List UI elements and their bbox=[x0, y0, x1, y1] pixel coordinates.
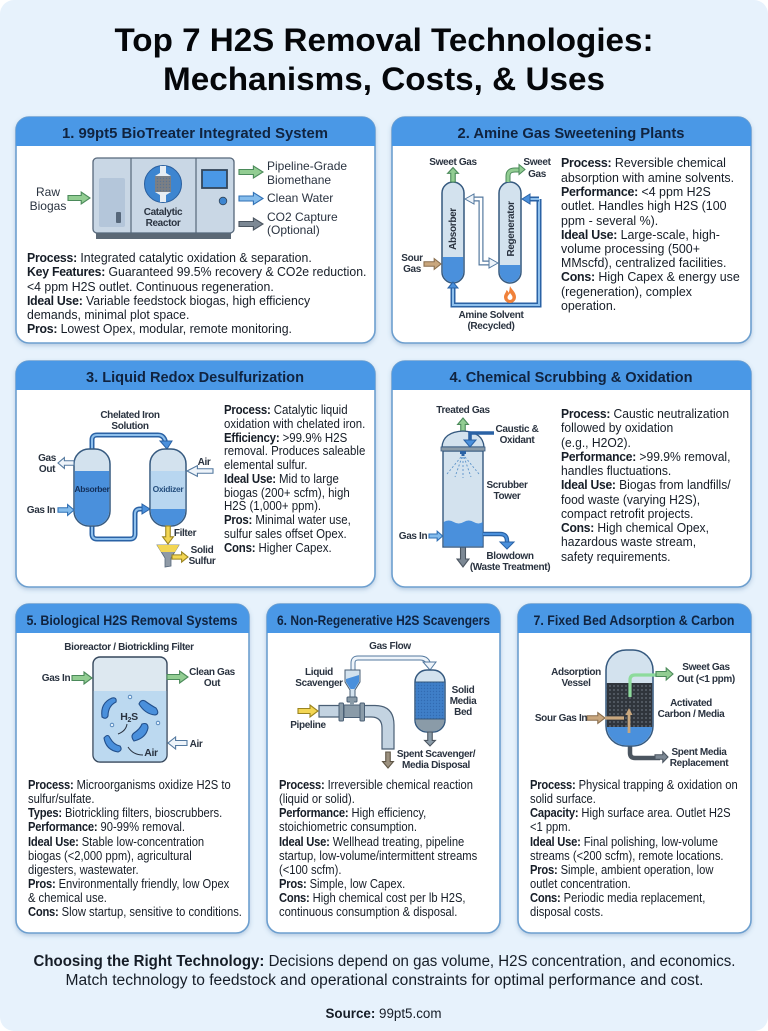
title: Top 7 H2S Removal Technologies: bbox=[114, 22, 654, 58]
panel 3 text: H2S (1,000+ ppm). bbox=[224, 498, 321, 513]
diagram labels: Gas In bbox=[42, 673, 70, 684]
panel 5 text bbox=[28, 777, 242, 919]
panel 3 text: removal. Produces saleable bbox=[224, 443, 366, 458]
diagram labels: Sweet Gas bbox=[682, 662, 731, 673]
panel 1 heading: 1. 99pt5 BioTreater Integrated System bbox=[62, 125, 328, 142]
diagram labels: Amine Solvent bbox=[459, 310, 524, 321]
label: raw biogas: Raw bbox=[36, 185, 60, 199]
panel 7 text: disposal costs. bbox=[530, 904, 603, 919]
arrow: solid media out bbox=[425, 732, 435, 746]
diagram labels: Treated Gas bbox=[436, 405, 490, 416]
inner labels: H bbox=[120, 711, 128, 723]
diagram labels: Scavenger bbox=[295, 678, 343, 689]
panel 5 heading: 5. Biological H2S Removal Systems bbox=[26, 612, 238, 628]
diagram labels: Tower bbox=[494, 491, 521, 502]
panel 6 text: Performance: High efficiency, bbox=[279, 805, 426, 820]
panel 2 text: Cons: High Capex & energy use bbox=[561, 270, 740, 284]
arrow heads bbox=[448, 194, 530, 288]
arrow: air bbox=[187, 466, 213, 476]
diagram labels: Vessel bbox=[561, 678, 591, 689]
panel 3 text bbox=[224, 402, 366, 555]
vessel: oxidizer: Oxidizer bbox=[153, 484, 184, 494]
vessel: absorber: Absorber bbox=[448, 208, 459, 250]
arrow: gas in bbox=[72, 672, 92, 684]
panel 4 heading bbox=[392, 361, 751, 390]
diagram labels: Spent Media bbox=[671, 747, 727, 758]
diagram labels: Solid bbox=[191, 545, 214, 556]
panel 2 heading bbox=[392, 117, 751, 146]
diagram labels: Gas bbox=[528, 169, 547, 180]
bubbles bbox=[110, 695, 160, 727]
panel 6 text: Process: Irreversible chemical reaction bbox=[279, 777, 473, 792]
vessel: regenerator bbox=[499, 182, 521, 283]
arrow: raw biogas in bbox=[68, 192, 90, 204]
panel 3 text: Efficiency: >99.9% H2S bbox=[224, 430, 347, 445]
footer summary: Match technology to feedstock and operational constraints for optimal performance and cost. bbox=[66, 972, 704, 989]
arrow: solid sulfur bbox=[172, 552, 188, 562]
inner labels bbox=[118, 711, 158, 759]
panel: 5. Biological H2S Removal Systems bbox=[16, 604, 249, 933]
panel 2 text bbox=[561, 156, 740, 313]
panel 6 text: startup, low-volume/intermittent streams bbox=[279, 848, 477, 863]
panel 7 text: Pros: Simple, ambient operation, low bbox=[530, 862, 714, 877]
panel 6 text: continuous consumption & disposal. bbox=[279, 904, 457, 919]
panel 4 text: food waste (varying H2S), bbox=[561, 493, 700, 507]
arrow: pipeline in bbox=[298, 705, 318, 717]
pipeline bbox=[319, 697, 394, 749]
panel 2 text: Ideal Use: Large-scale, high- bbox=[561, 228, 720, 242]
panel 2 text: operation. bbox=[561, 299, 616, 313]
arrow: gas in bbox=[58, 505, 74, 515]
panel 6 text: Cons: High chemical cost per lb H2S, bbox=[279, 890, 466, 905]
panel 7 text: Cons: Periodic media replacement, bbox=[530, 890, 705, 905]
panel 5 text: digesters, wastewater. bbox=[28, 862, 139, 877]
diagram labels: Out (<1 ppm) bbox=[677, 674, 735, 685]
panel 5 text: biogas (<2,000 ppm), agricultural bbox=[28, 848, 192, 863]
panel 6 text: Ideal Use: Wellhead treating, pipeline bbox=[279, 834, 465, 849]
panel 2 text: Process: Reversible chemical bbox=[561, 156, 726, 170]
diagram: scavenger piping bbox=[290, 641, 477, 771]
panel: 3. Liquid Redox Desulfurization bbox=[16, 361, 375, 587]
panel 4 text: Process: Caustic neutralization bbox=[561, 407, 729, 421]
panel 3 text: elemental sulfur. bbox=[224, 457, 307, 472]
vessel: oxidizer bbox=[150, 449, 186, 526]
spent media pipe bbox=[630, 746, 668, 762]
vessel: absorber bbox=[74, 449, 111, 526]
panel 2 text: ppm - several %). bbox=[561, 214, 658, 228]
panel 1 text: <4 ppm H2S outlet. Continuous regeneration. bbox=[27, 280, 274, 294]
outputs bbox=[267, 159, 347, 237]
diagram labels: Out bbox=[204, 678, 221, 689]
diagram labels: Gas bbox=[38, 453, 57, 464]
diagram labels: Caustic & bbox=[496, 424, 539, 435]
diagram labels: Sweet Gas bbox=[429, 157, 478, 168]
outputs: Pipeline-Grade bbox=[267, 159, 347, 173]
title: Mechanisms, Costs, & Uses bbox=[163, 61, 605, 97]
panel 5 text: Ideal Use: Stable low-concentration bbox=[28, 834, 204, 849]
panel 5 text: Cons: Slow startup, sensitive to conditions. bbox=[28, 904, 242, 919]
vessel: absorber: Absorber bbox=[74, 484, 111, 494]
arrow: gas out bbox=[58, 458, 74, 468]
panel 4 text: handles fluctuations. bbox=[561, 464, 671, 478]
diagram: integrated system: Reactor bbox=[146, 218, 181, 229]
arrow: caustic in bbox=[464, 433, 494, 447]
diagram labels: Gas bbox=[403, 264, 422, 275]
diagram labels: Spent Scavenger/ bbox=[397, 749, 476, 760]
panel 7 heading: 7. Fixed Bed Adsorption & Carbon bbox=[534, 612, 734, 628]
outputs: Biomethane bbox=[267, 173, 331, 187]
panel 6 heading bbox=[267, 604, 500, 633]
panel 2 text: volume processing (500+ bbox=[561, 242, 700, 256]
footer summary: Choosing the Right Technology: Decisions depend on gas volume, H2S concentration, and economics. bbox=[34, 953, 736, 970]
diagram labels bbox=[399, 405, 550, 573]
diagram labels: Activated bbox=[670, 698, 712, 709]
diagram labels: Media bbox=[450, 696, 477, 707]
panel: 4. Chemical Scrubbing & Oxidation bbox=[392, 361, 751, 587]
outputs: Clean Water bbox=[267, 191, 333, 205]
panel 7 text: Process: Physical trapping & oxidation on bbox=[530, 777, 738, 792]
panel 5 text: Pros: Environmentally friendly, low Opex bbox=[28, 876, 229, 891]
panel 3 text: Pros: Minimal water use, bbox=[224, 512, 351, 527]
diagram labels: Replacement bbox=[670, 758, 729, 769]
outputs: (Optional) bbox=[267, 223, 320, 237]
panel 3 text: Ideal Use: Mid to large bbox=[224, 471, 339, 486]
panel 7 text bbox=[530, 777, 738, 919]
panel 2 text: absorption with amine solvents. bbox=[561, 171, 734, 185]
diagram labels: Scrubber bbox=[486, 480, 528, 491]
panel 7 text: <1 ppm. bbox=[530, 819, 571, 834]
diagram labels: Liquid bbox=[305, 667, 333, 678]
arrow: blowdown bottom bbox=[457, 547, 469, 567]
arrow: sweet gas out bbox=[448, 168, 458, 182]
diagram: bioreactor bbox=[42, 642, 236, 762]
panel: 1. 99pt5 BioTreater Integrated System bbox=[16, 117, 375, 343]
arrow: clean water bbox=[239, 192, 263, 204]
diagram labels: Filter bbox=[174, 528, 197, 539]
panel 3 text: Process: Catalytic liquid bbox=[224, 402, 348, 417]
diagram labels: Blowdown bbox=[486, 551, 534, 562]
panel 1 text: Ideal Use: Variable feedstock biogas, high efficiency bbox=[27, 294, 311, 308]
panel 5 text: Process: Microorganisms oxidize H2S to bbox=[28, 777, 231, 792]
panel 5 text: & chemical use. bbox=[28, 890, 107, 905]
arrow: biomethane bbox=[239, 166, 263, 178]
panel 7 text: Ideal Use: Final polishing, low-volume bbox=[530, 834, 718, 849]
panel 2 text: (regeneration), complex bbox=[561, 285, 693, 299]
diagram labels: Chelated Iron bbox=[100, 410, 160, 421]
panel 2 heading: 2. Amine Gas Sweetening Plants bbox=[458, 125, 684, 142]
panel 2 text: MMscfd), centralized facilities. bbox=[561, 256, 726, 270]
panel 7 text: streams (<200 scfm), remote locations. bbox=[530, 848, 724, 863]
vessel bbox=[93, 657, 167, 762]
diagram labels: (Recycled) bbox=[467, 321, 515, 332]
arrow: filter bbox=[163, 526, 173, 544]
panel 1 text: Key Features: Guaranteed 99.5% recovery & CO2e reduction. bbox=[27, 265, 366, 279]
panel 4 heading: 4. Chemical Scrubbing & Oxidation bbox=[450, 369, 692, 386]
panel 4 text: compact retrofit projects. bbox=[561, 507, 693, 521]
diagram labels: Adsorption bbox=[551, 667, 601, 678]
panel 6 heading: 6. Non-Regenerative H2S Scavengers bbox=[277, 612, 490, 628]
panel 4 text: Performance: >99.9% removal, bbox=[561, 450, 730, 464]
sweet gas pipe bbox=[630, 668, 673, 697]
gas flow pipe bbox=[353, 658, 436, 671]
panel 5 heading bbox=[16, 604, 249, 633]
panel 3 text: biogas (200+ scfm), high bbox=[224, 485, 350, 500]
diagram labels: Solution bbox=[111, 421, 149, 432]
panel 1 text: Process: Integrated catalytic oxidation & separation. bbox=[27, 251, 312, 265]
diagram labels: Sulfur bbox=[189, 556, 216, 567]
source: Source: 99pt5.com bbox=[326, 1006, 442, 1021]
diagram labels bbox=[27, 410, 216, 567]
diagram: integrated system: Catalytic bbox=[144, 207, 183, 218]
arrow: clean gas bbox=[167, 671, 188, 683]
panel 1 text: Pros: Lowest Opex, modular, remote monitoring. bbox=[27, 322, 292, 336]
bacteria bbox=[102, 698, 158, 752]
panel 7 text: outlet concentration. bbox=[530, 876, 631, 891]
panel 3 heading bbox=[16, 361, 375, 390]
arrow: treated gas bbox=[458, 418, 468, 434]
sour gas pipe bbox=[587, 708, 632, 733]
label: raw biogas: Biogas bbox=[30, 199, 66, 213]
panel 4 text bbox=[561, 407, 731, 564]
diagram labels: Sweet bbox=[523, 157, 552, 168]
panel 6 text: Pros: Simple, low Capex. bbox=[279, 876, 405, 891]
diagram: redox loop bbox=[27, 410, 216, 567]
panel 5 text: Performance: 90-99% removal. bbox=[28, 819, 185, 834]
vessel: solid media bbox=[415, 670, 445, 732]
panel 3 text: oxidation with chelated iron. bbox=[224, 416, 365, 431]
diagram labels: Gas In bbox=[27, 505, 55, 516]
title bbox=[114, 22, 654, 97]
panel 7 heading bbox=[518, 604, 751, 633]
diagram labels bbox=[535, 662, 735, 769]
diagram: scrubber tower bbox=[399, 405, 550, 573]
arrow: sour gas bbox=[424, 259, 441, 269]
panel 6 text bbox=[279, 777, 477, 919]
panel 5 text: sulfur/sulfate. bbox=[28, 791, 94, 806]
panel 1 text bbox=[27, 251, 366, 336]
arrow: air bbox=[168, 737, 187, 749]
panel 7 text: solid surface. bbox=[530, 791, 596, 806]
panel: 7. Fixed Bed Adsorption & Carbon bbox=[518, 604, 751, 933]
diagram labels bbox=[42, 642, 236, 750]
footer summary bbox=[34, 953, 736, 989]
panel 4 text: followed by oxidation bbox=[561, 421, 673, 435]
panel 7 text: Capacity: High surface area. Outlet H2S bbox=[530, 805, 731, 820]
panel 4 text: hazardous waste stream, bbox=[561, 535, 696, 549]
diagram labels: Bed bbox=[454, 707, 472, 718]
inner labels: S bbox=[131, 711, 138, 723]
tower bbox=[441, 431, 485, 547]
liquid funnel bbox=[345, 670, 360, 697]
diagram labels: Media Disposal bbox=[402, 760, 471, 771]
diagram labels: Gas Flow bbox=[369, 641, 411, 652]
vessel: regenerator: Regenerator bbox=[506, 201, 517, 257]
diagram labels: Bioreactor / Biotrickling Filter bbox=[64, 642, 194, 653]
panel 2 text: Performance: <4 ppm H2S bbox=[561, 185, 711, 199]
panel 2 text: outlet. Handles high H2S (100 bbox=[561, 199, 727, 213]
diagram: integrated system bbox=[30, 158, 347, 239]
arrow: regenerator vent bbox=[508, 164, 525, 182]
panel 5 text: Types: Biotrickling filters, bioscrubbers. bbox=[28, 805, 222, 820]
panel 6 text: stoichiometric consumption. bbox=[279, 819, 417, 834]
panel 3 text: sulfur sales offset Opex. bbox=[224, 526, 347, 541]
panel 1 text: demands, minimal plot space. bbox=[27, 308, 189, 322]
diagram: adsorption vessel bbox=[535, 650, 735, 769]
diagram labels: Out bbox=[39, 464, 56, 475]
diagram labels: Gas In bbox=[399, 531, 427, 542]
diagram labels: Air bbox=[198, 457, 211, 468]
panel 4 text: Ideal Use: Biogas from landfills/ bbox=[561, 478, 731, 492]
outputs: CO2 Capture bbox=[267, 210, 338, 224]
label: raw biogas bbox=[30, 185, 66, 213]
vessel bbox=[606, 650, 653, 746]
panel 6 text: (<100 scfm). bbox=[279, 862, 341, 877]
diagram labels: Pipeline bbox=[290, 720, 327, 731]
diagram labels bbox=[401, 157, 552, 332]
diagram labels: Air bbox=[190, 739, 203, 750]
diagram labels: Sour Gas In bbox=[535, 713, 587, 724]
diagram labels: Sour bbox=[401, 253, 423, 264]
diagram labels bbox=[290, 641, 477, 771]
inner labels: 2 bbox=[128, 717, 132, 724]
panel: 6. Non-Regenerative H2S Scavengers bbox=[267, 604, 500, 933]
diagram labels: Clean Gas bbox=[189, 667, 236, 678]
arrow: CO2 bbox=[239, 218, 263, 230]
diagram labels: Solid bbox=[452, 685, 475, 696]
panel 3 text: Cons: Higher Capex. bbox=[224, 540, 332, 555]
diagram labels: (Waste Treatment) bbox=[470, 562, 550, 573]
arrow: blowdown pipe bbox=[483, 534, 514, 549]
diagram labels: Oxidant bbox=[500, 435, 535, 446]
vessel: absorber bbox=[442, 182, 464, 283]
panel 6 text: (liquid or solid). bbox=[279, 791, 355, 806]
panel 4 text: safety requirements. bbox=[561, 550, 671, 564]
icon: flame bbox=[504, 286, 516, 303]
inner labels: Air bbox=[144, 747, 158, 759]
icon: funnel bbox=[157, 545, 179, 567]
panel 1 heading bbox=[16, 117, 375, 146]
panel 3 heading: 3. Liquid Redox Desulfurization bbox=[86, 369, 304, 386]
diagram: amine loop bbox=[401, 157, 552, 332]
arrow: down pipe bbox=[383, 752, 393, 768]
panel 4 text: Cons: High chemical Opex, bbox=[561, 521, 709, 535]
arrow: gas in bbox=[429, 531, 443, 541]
panel 4 text: (e.g., H2O2). bbox=[561, 436, 631, 450]
diagram labels: Carbon / Media bbox=[658, 709, 725, 720]
panel: 2. Amine Gas Sweetening Plants bbox=[392, 117, 751, 343]
